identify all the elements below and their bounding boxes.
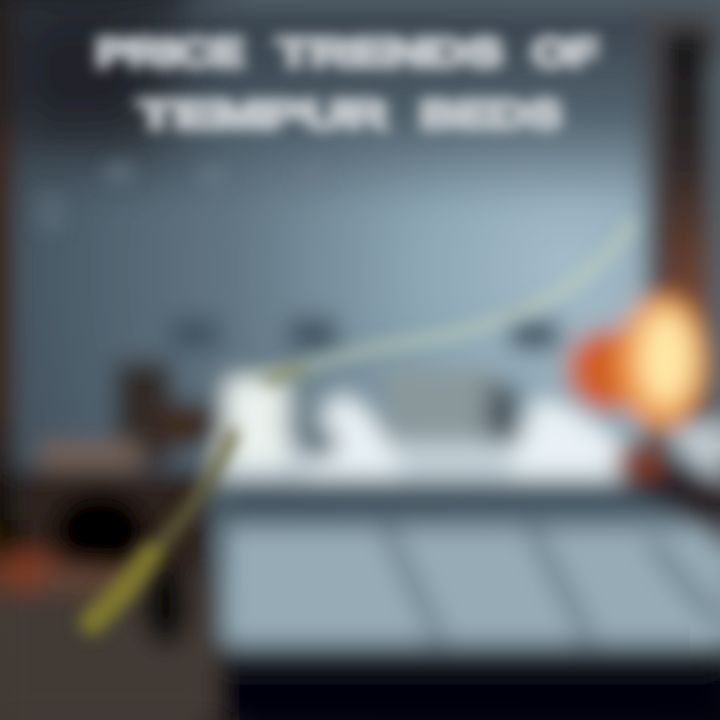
mattress quilted surface: [224, 525, 720, 644]
grey headboard panels: [288, 368, 520, 447]
left nightstand and chair: [0, 362, 220, 720]
title: OF: [532, 31, 598, 75]
title: PRICE: [96, 31, 244, 75]
title: BEDS: [420, 93, 562, 137]
right bedside table: [614, 420, 720, 545]
yellow trend line lower section: [92, 435, 232, 622]
white pillows: [215, 378, 626, 480]
title: TRENDS: [277, 31, 503, 75]
pillow shadow: [298, 427, 338, 459]
faint chart labels: [36, 162, 326, 232]
title: TEMPUR: [138, 93, 388, 137]
right window frame and curtain: [640, 0, 720, 450]
bed blanket fold: [222, 482, 720, 516]
trend line curve: [270, 225, 632, 378]
title: [96, 31, 598, 137]
glowing bedside lamp: [568, 296, 706, 428]
bed base shadow: [200, 648, 720, 720]
headboard posts: [170, 318, 560, 350]
trend line and label layer: [36, 162, 632, 622]
left dark wood post: [0, 0, 14, 600]
background wall: [0, 0, 720, 520]
